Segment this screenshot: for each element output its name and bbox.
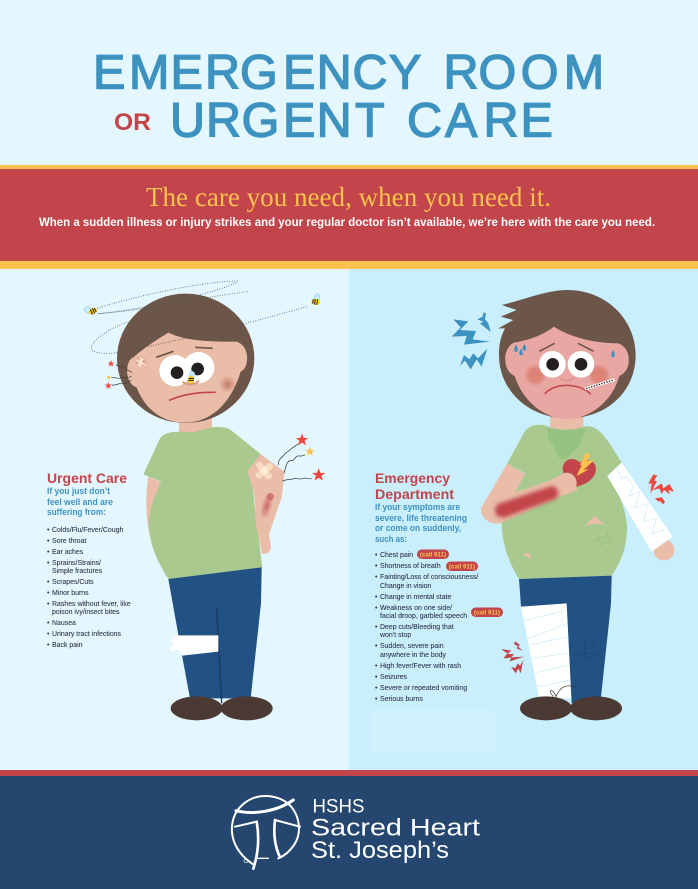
emergency symptom list: Deep cuts/Bleeding that [380,624,454,631]
scrape on temple [135,356,147,368]
leg bandage [170,635,218,656]
emergency symptom list: Serious burns [380,696,423,703]
cast hand [654,540,674,560]
mouth [545,385,591,394]
banner [0,165,698,269]
urgent care symptom list: Rashes without fever, like [52,601,131,608]
panel: emergency department background [349,269,698,770]
mouth [169,392,216,400]
emergency symptom list: • [375,605,378,612]
title: EMERGENCY ROOM [93,46,604,100]
emergency symptom list: Weakness on one side/ [380,605,452,612]
heart lightning bolt [577,453,594,476]
bruise on cheek [219,376,236,393]
title: URGENT CARE [170,94,553,148]
urgent care symptom list [47,527,131,649]
emergency intro: or come on suddenly, [375,523,461,534]
urgent care symptom list: Simple fractures [52,568,103,575]
urgent care intro: If you just don’t [47,486,111,497]
emergency intro: If your symptoms are [375,502,460,513]
emergency symptom list: Severe or repeated vomiting [380,685,467,692]
urgent care symptom list: Colds/Flu/Fever/Cough [52,527,123,534]
hair [498,290,636,418]
eyes [159,352,214,386]
bee right [311,293,321,306]
emergency symptom list: Chest pain [380,552,413,559]
emergency intro: severe, life threatening [375,513,467,524]
urgent care symptom list: poison ivy/insect bites [52,609,120,616]
thermometer [585,380,614,389]
emergency symptom list: anywhere in the body [380,652,446,659]
head pain marks [105,360,132,389]
bee on nose [188,371,195,384]
call 911 badge chest pain: (call 911) [420,552,446,558]
urgent care symptom list: • [47,590,50,597]
heart [563,459,596,487]
trousers [168,567,262,698]
urgent care symptom list: • [47,527,50,534]
emergency symptom list: • [375,574,378,581]
trouser scratch [578,637,600,660]
red pain zigzags near leg [501,641,524,673]
emergency figure [370,290,674,752]
footer [0,770,698,889]
hand [557,473,577,494]
emergency intro [375,502,467,545]
shoes [171,696,273,720]
arm scrape [258,491,276,521]
neck [550,413,583,433]
call 911 badge weakness [471,608,503,617]
emergency symptom list: • [375,674,378,681]
urgent care symptom list: • [47,631,50,638]
emergency symptom list: Shortness of breath [380,563,441,570]
upper arm [481,463,578,524]
urgent care symptom list: Ear aches [52,549,84,556]
emergency symptom list: Fainting/Loss of consciousness/ [380,574,478,581]
trouser seam [217,608,222,703]
panel: urgent care background [0,269,349,770]
plaster on arm [254,461,274,481]
banner tagline: The care you need, when you need it. [146,182,551,212]
sweat drops [514,344,615,357]
nose [183,381,199,384]
nose [561,377,574,381]
emergency symptom list: • [375,663,378,670]
urgent care symptom list: Minor burns [52,590,89,597]
blue headache zigzags [452,312,491,369]
face [127,333,247,423]
emergency symptom list: Change in vision [380,583,431,590]
red pain zigzags near cast [648,474,674,504]
shirt tears [522,516,605,559]
arm wound [495,486,558,517]
leg cast [521,603,572,698]
shirt scratch [592,530,613,547]
emergency department text block [375,471,503,703]
urgent care symptom list: • [47,538,50,545]
emergency symptom list: • [375,563,378,570]
bee left [82,302,98,318]
shirt [502,425,627,579]
neck [179,413,212,437]
footer wordmark: HSHS [312,797,364,818]
banner description: When a sudden illness or injury strikes and your regular doctor isn’t available, we’re here with the care you need. [39,217,655,229]
emergency heading: Emergency [375,471,450,486]
shirt [143,427,262,579]
urgent care text block [47,471,131,649]
call 911 badge breath [446,562,478,571]
emergency heading [375,471,455,502]
shoes [520,696,622,720]
emergency symptom list: won’t stop [379,632,411,639]
emergency symptom list: Change in mental state [380,594,451,601]
emergency heading: Department [375,487,455,502]
urgent care symptom list: Urinary tract infections [52,631,122,638]
faint box [370,710,495,752]
arm pain marks [278,433,325,481]
cheeks [524,364,610,386]
emergency symptom list: • [375,594,378,601]
emergency symptom list: • [375,552,378,559]
title: OR [114,109,151,136]
face [505,327,629,419]
urgent care figure [82,281,325,720]
urgent care symptom list: Scrapes/Cuts [52,579,94,586]
emergency symptom list: facial droop, garbled speech [380,613,467,620]
left arm behind shirt [146,477,163,537]
call 911 badge weakness: (call 911) [474,610,500,616]
footer wordmark: St. Joseph’s [311,837,449,864]
emergency symptom list [375,552,478,703]
emergency symptom list: • [375,696,378,703]
emergency symptom list: Seizures [380,674,408,681]
urgent care symptom list: • [47,560,50,567]
urgent care symptom list: Back pain [52,642,83,649]
urgent care heading: Urgent Care [47,471,127,486]
urgent care symptom list: • [47,620,50,627]
emergency symptom list: Sudden, severe pain [380,643,444,650]
urgent care symptom list: Sprains/Strains/ [52,560,101,567]
call 911 badge chest pain [417,550,449,559]
urgent care intro: feel well and are [47,497,113,508]
emergency symptom list: • [375,624,378,631]
emergency intro: such as: [375,534,407,545]
eyes [539,351,594,378]
title [93,46,604,148]
vomit stain [547,428,585,459]
footer wordmark [311,797,480,864]
urgent care symptom list: • [47,549,50,556]
urgent care symptom list: • [47,642,50,649]
urgent care intro [47,486,113,518]
urgent care intro: suffering from: [47,507,106,518]
call 911 badge breath: (call 911) [449,564,475,570]
emergency symptom list: • [375,685,378,692]
urgent care symptom list: • [47,579,50,586]
footer logo mark [232,796,300,869]
emergency symptom list: High fever/Fever with rash [380,663,461,670]
bee path dotted [91,281,307,353]
eyebrows [539,343,594,351]
shoelace [550,686,576,697]
eyebrows [156,347,213,357]
hair [117,294,254,423]
right arm with injuries [247,454,284,554]
trousers [519,576,612,703]
emergency symptom list: • [375,643,378,650]
arm cast [607,463,673,552]
urgent care symptom list: Nausea [52,620,76,627]
footer wordmark: Sacred Heart [311,815,480,842]
urgent care symptom list: Sore throat [52,538,86,545]
urgent care symptom list: • [47,601,50,608]
